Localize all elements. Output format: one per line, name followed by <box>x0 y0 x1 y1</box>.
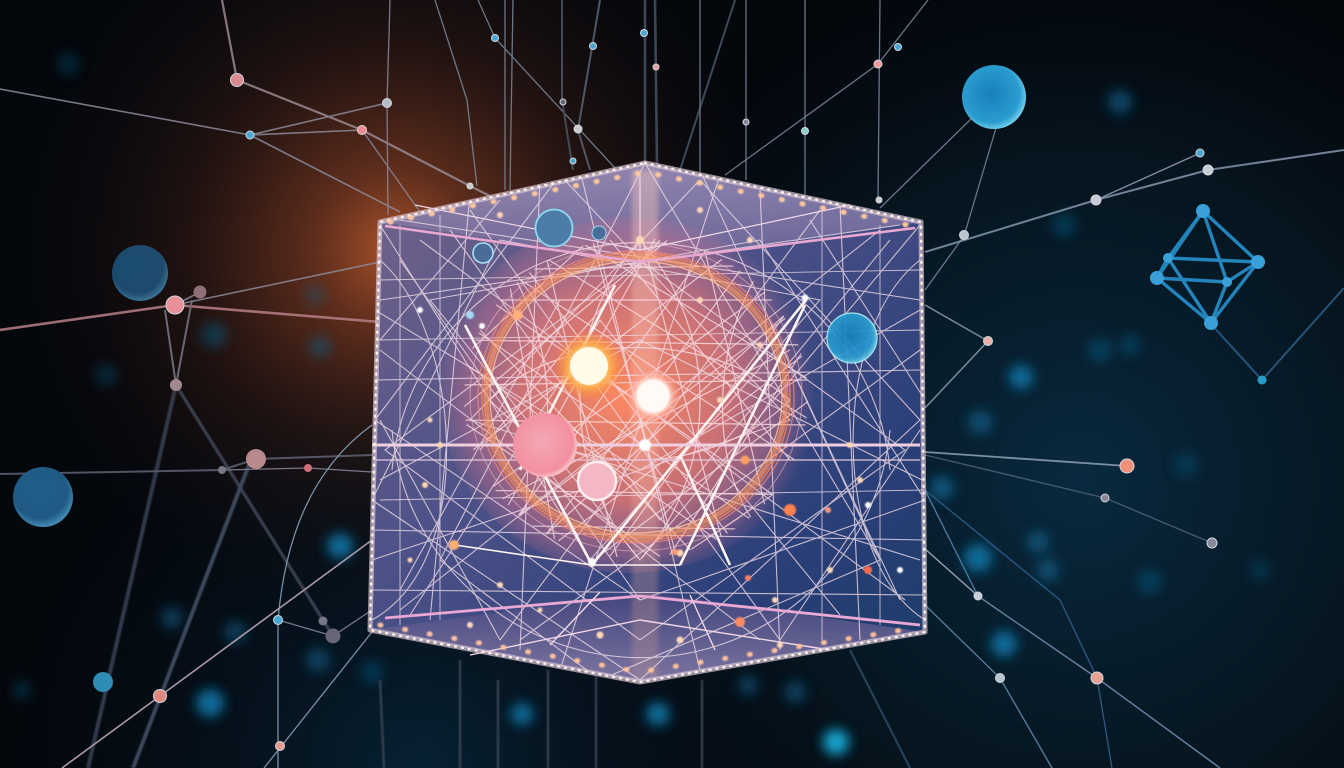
sphere: top right blue <box>962 65 1026 129</box>
cube: inner mesh lines <box>372 163 925 680</box>
cube: dense core mesh <box>460 230 810 570</box>
cube: light beam <box>632 170 658 680</box>
sphere: small blue top <box>536 210 572 246</box>
sphere: bright orange core <box>553 330 625 402</box>
sphere: cyan right in cube <box>827 313 877 363</box>
icon: wireframe polyhedron <box>1150 204 1265 330</box>
cube: body <box>370 163 925 682</box>
sphere: left upper blue <box>112 245 168 301</box>
cube: dotted frame <box>370 163 925 682</box>
cube: glowing nodes <box>408 207 903 648</box>
cube: bright star lines <box>372 175 920 655</box>
network lines: left <box>0 0 702 768</box>
cube: core glow <box>440 217 820 573</box>
cube: top face <box>380 163 921 262</box>
sphere: large pink <box>513 413 577 477</box>
sphere: left lower blue <box>13 467 73 527</box>
sphere: tiny blue top right <box>592 226 606 240</box>
cube: floor face <box>370 592 925 682</box>
cube: orange ring <box>470 243 802 551</box>
network lines: right <box>850 150 1344 768</box>
network lines: top <box>435 0 996 290</box>
sphere: tiny blue top <box>473 243 493 263</box>
sphere: small pink <box>578 462 616 500</box>
sphere: bright white core <box>625 368 681 424</box>
